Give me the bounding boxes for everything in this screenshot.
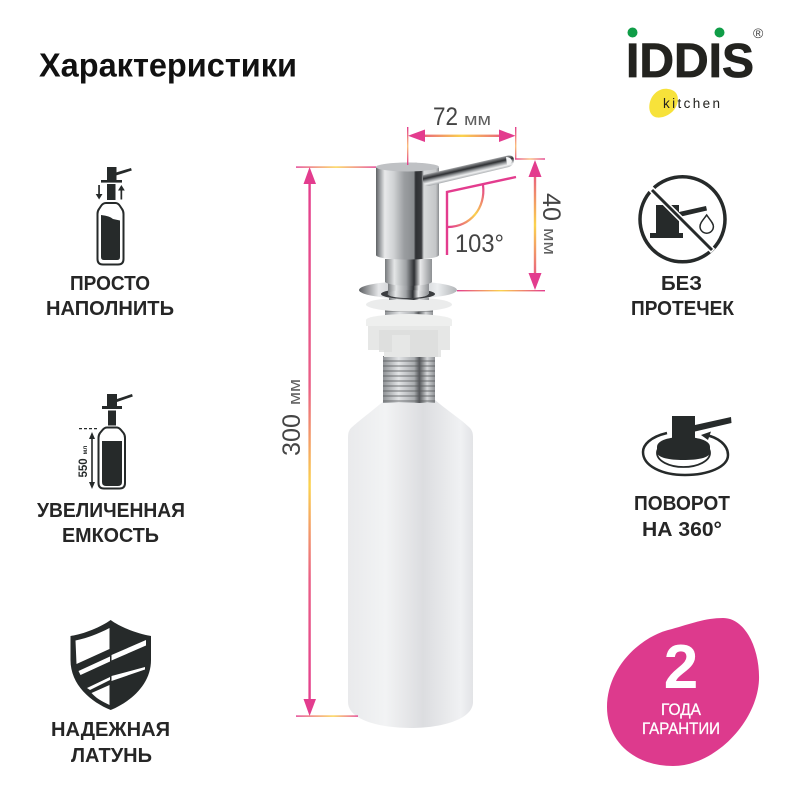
registered mark: ®	[753, 25, 764, 41]
icon: shield	[70, 620, 151, 710]
height value: 40	[537, 193, 565, 221]
label: easy to fill: ПРОСТО	[70, 273, 150, 295]
capacity label	[78, 446, 90, 478]
lever handle	[423, 155, 514, 186]
dimension: width 72 mm	[407, 103, 516, 165]
label: increased capacity: УВЕЛИЧЕННАЯ	[37, 500, 185, 522]
flange	[359, 281, 457, 299]
angle value: 103°	[455, 230, 504, 258]
threaded stem	[383, 356, 435, 403]
height arrow	[457, 158, 545, 291]
plastic nut	[366, 314, 452, 357]
bottle	[348, 400, 473, 728]
dimension: height 40 mm	[457, 158, 565, 291]
label: no leaks: БЕЗ	[661, 273, 702, 295]
logo: IDDIS kitchen	[626, 25, 764, 118]
logo kitchen text: kitchen	[663, 96, 720, 111]
total height arrow	[296, 166, 376, 717]
angle lines	[447, 177, 516, 255]
icon: 550 ml bottle	[79, 394, 133, 489]
pump cap	[376, 162, 439, 172]
warranty number: 2	[664, 633, 698, 702]
label: 360 rotation: ПОВОРОТ	[634, 493, 730, 515]
capacity label: мл	[82, 446, 89, 454]
feature: no leaks	[631, 177, 735, 320]
feature: reliable brass	[51, 620, 170, 767]
label line 2: ЕМКОСТЬ	[62, 525, 159, 547]
dimension: total height 300 mm	[278, 166, 376, 717]
collar base	[389, 284, 429, 300]
label line 2: НАПОЛНИТЬ	[46, 298, 174, 320]
label line 2: НА 360°	[642, 519, 722, 541]
dimension: angle 103 degrees	[447, 177, 516, 258]
logo yellow spot	[649, 89, 678, 118]
short thread	[385, 308, 433, 323]
feature: increased capacity	[37, 394, 185, 547]
logo wordmark: IDDIS	[626, 34, 754, 88]
icon: refillable bottle	[96, 167, 132, 264]
product: soap dispenser	[348, 155, 514, 728]
icon: crossed-out faucet with drop	[640, 177, 725, 262]
width unit: мм	[464, 110, 491, 129]
capacity label: 550	[78, 458, 90, 478]
warranty badge	[607, 618, 759, 766]
total height unit: мм	[285, 379, 304, 405]
title: Характеристики	[39, 46, 297, 84]
warranty text line 2: ГАРАНТИИ	[642, 720, 720, 738]
height unit: мм	[540, 228, 559, 255]
washer	[366, 298, 452, 312]
label: reliable brass: НАДЕЖНАЯ	[51, 719, 170, 741]
width arrow	[407, 127, 516, 165]
feature: easy to fill	[46, 167, 174, 320]
width value: 72	[433, 103, 458, 131]
label line 2: ПРОТЕЧЕК	[631, 298, 735, 320]
pump head	[376, 163, 439, 260]
label line 2: ЛАТУНЬ	[71, 745, 152, 767]
warranty text line 1: ГОДА	[661, 701, 701, 719]
icon: rotating faucet	[643, 416, 732, 475]
collar	[385, 259, 432, 286]
logo green dots	[628, 28, 724, 38]
total height value: 300	[278, 414, 306, 456]
badge blob	[607, 618, 759, 766]
feature: 360 rotation	[634, 416, 732, 541]
